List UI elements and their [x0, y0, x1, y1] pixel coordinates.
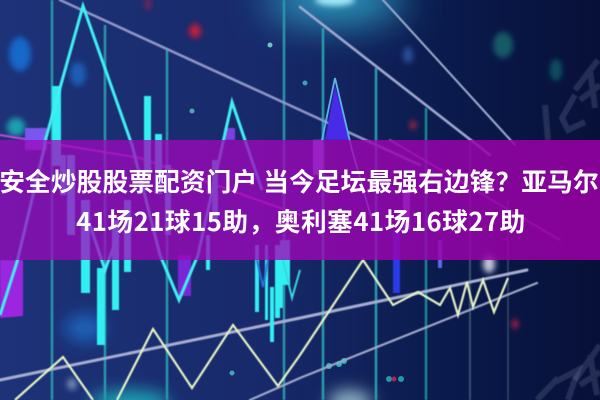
title band — [0, 140, 600, 260]
yellow-white zigzag line — [15, 260, 508, 400]
purple blocks — [0, 85, 442, 318]
vertical grid lines — [52, 0, 508, 400]
blue zigzag line — [322, 78, 372, 220]
title line 2: 41场21球15助，奥利塞41场16球27助 — [76, 202, 526, 239]
cyan zigzag line — [0, 6, 300, 315]
title line 1: 安全炒股股票配资门户 当今足坛最强右边锋？亚马尔 — [0, 162, 599, 199]
candlestick bars — [52, 86, 290, 345]
watermark — [537, 60, 600, 400]
